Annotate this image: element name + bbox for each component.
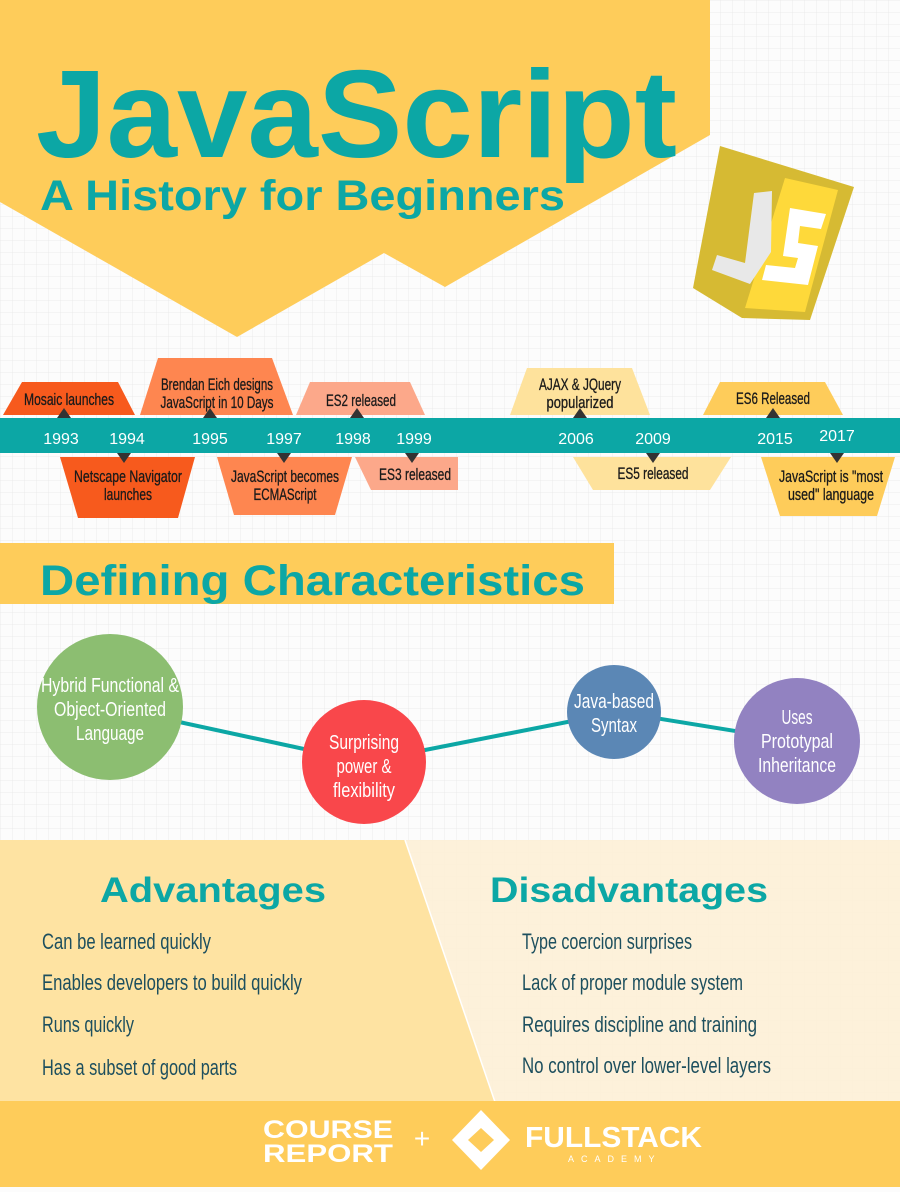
event: ES6 [703,382,843,418]
circle: syntax: Java-based [574,691,654,713]
circle: prototypal [734,678,860,804]
years: 2017 [819,428,855,445]
circle: hybrid: Object-Oriented [54,699,166,721]
logo: Course Report: REPORT [263,1140,393,1168]
list: advantages [42,929,302,1080]
heading: Defining Characteristics [0,543,614,605]
years: 1999 [396,431,432,448]
logo: Fullstack Academy: FULLSTACK [525,1122,702,1154]
list: disadvantages: Lack of proper module system [522,970,743,995]
event: ECMAScript: ECMAScript [254,486,317,504]
circle: power: flexibility [333,780,395,802]
icon: JS logo [693,146,854,320]
event: most used: used" language [788,486,874,504]
years: 1995 [192,431,228,448]
list: advantages: Runs quickly [42,1012,134,1037]
event: ES2 [296,382,425,418]
logo: Course Report [263,1116,393,1168]
event: AJAX [510,368,650,418]
circle: syntax [567,665,661,759]
list: advantages: Can be learned quickly [42,929,211,954]
characteristics chart [37,634,860,824]
years [43,428,855,448]
list: disadvantages: No control over lower-level layers [522,1053,771,1078]
panel: advantages / disadvantages [0,840,900,1102]
circle: prototypal: Uses [782,707,812,729]
footer [0,1101,900,1187]
event: AJAX: popularized [546,394,614,412]
list: disadvantages: Type coercion surprises [522,929,692,954]
list: advantages: Enables developers to build quickly [42,970,302,995]
circle: hybrid [37,634,183,780]
event: Brendan Eich: Brendan Eich designs [161,376,273,394]
event: ES6: ES6 Released [736,390,810,408]
event: most used [761,453,895,516]
event: Netscape [60,453,195,518]
heading: Disadvantages: Disadvantages [490,871,768,910]
header banner [0,0,710,337]
event: ES2: ES2 released [326,392,396,410]
event: Netscape: Netscape Navigator [74,468,182,486]
logo: Fullstack Academy [452,1110,702,1170]
years: 1998 [335,431,371,448]
plus: + [414,1123,430,1154]
logo: Course Report: COURSE [263,1116,393,1144]
circle: prototypal: Inheritance [758,755,836,777]
list: advantages: Has a subset of good parts [42,1055,237,1080]
years: 2009 [635,431,671,448]
subtitle: A History for Beginners [40,172,565,220]
logo: Fullstack Academy: ACADEMY [568,1154,662,1164]
list: disadvantages: Requires discipline and training [522,1012,757,1037]
event: ECMAScript: JavaScript becomes [231,468,339,486]
event: ES5 [573,453,731,490]
event: Mosaic launches [3,382,135,418]
circle: hybrid: Hybrid Functional & [41,675,180,697]
years: 2015 [757,431,793,448]
circle: power [302,700,426,824]
event: ES3 [355,453,458,490]
years: 1994 [109,431,145,448]
years: 1997 [266,431,302,448]
event: Netscape: launches [104,486,152,504]
years: 1993 [43,431,79,448]
circle: prototypal: Prototypal [761,731,833,753]
event: Brendan Eich: JavaScript in 10 Days [160,394,274,412]
title: JavaScript [36,46,677,184]
event: ES5: ES5 released [618,465,688,483]
years: 2006 [558,431,594,448]
list: disadvantages [522,929,771,1078]
heading: Defining Characteristics: Defining Characteristics [40,557,585,605]
event: AJAX: AJAX & JQuery [539,376,622,394]
heading: Advantages: Advantages [100,871,326,910]
circle: power: Surprising [329,732,399,754]
circle: power: power & [336,756,392,778]
event: Mosaic launches: Mosaic launches [24,391,114,409]
event: ES3: ES3 released [379,466,451,484]
timeline [0,358,900,518]
event: Brendan Eich [140,358,293,418]
event: ECMAScript [217,453,352,515]
circle: syntax: Syntax [591,715,637,737]
circle: hybrid: Language [76,723,144,745]
